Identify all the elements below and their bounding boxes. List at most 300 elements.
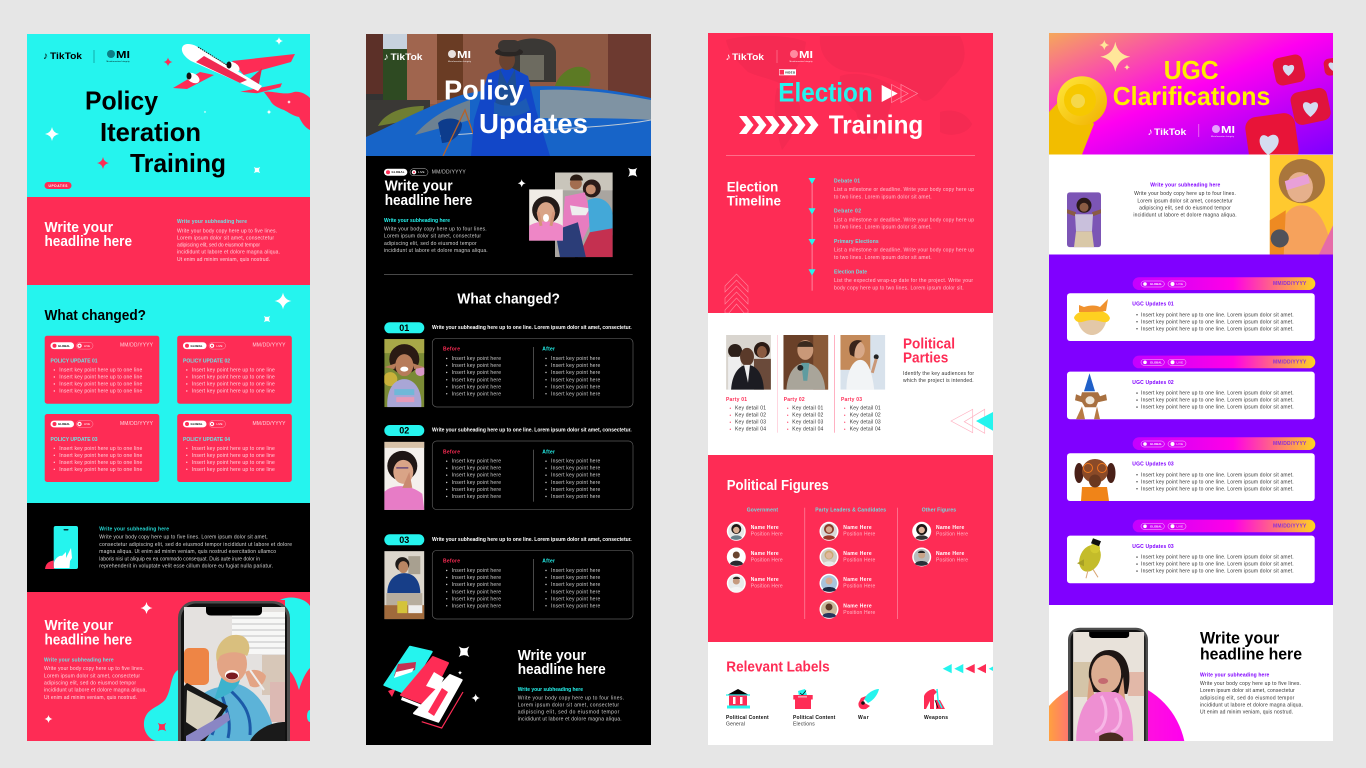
logo: TikTok and MI white: Misinformation Integrity [448, 60, 471, 63]
item 01 before and after: Insert key point here [551, 384, 601, 390]
subheading and body copy: Write your body copy here up to five lines. Lorem ipsum dolor sit amet, [99, 535, 268, 541]
item 02 before and after: Insert key point here [551, 473, 601, 479]
subheading and body copy: Write your subheading here [1200, 672, 1270, 678]
card: policy update 02: GLOBAL [190, 344, 203, 348]
item 01 before and after: Insert key point here [551, 356, 601, 362]
item 01 before and after [383, 322, 633, 407]
heading: election timeline [727, 179, 781, 209]
timeline entries [834, 178, 974, 291]
closing headline and copy: Write your [518, 648, 586, 664]
icon: gold sparkles [1099, 40, 1130, 72]
icon: play arrows [882, 84, 918, 102]
panel: UGC updates [1049, 254, 1333, 606]
item 02 before and after: 02 [399, 426, 409, 436]
party 01 column: Party 01 [726, 397, 747, 403]
photo: woman with disco ball [1270, 155, 1333, 254]
subheading and body copy: Write your body copy here up to five lines. [1200, 681, 1301, 687]
icon: outlined triangles [951, 409, 993, 433]
closing headline and copy: Write your body copy here up to four lines. [518, 695, 624, 701]
closing headline: Write your [1200, 629, 1280, 647]
intro text block: Write your subheading here [384, 218, 450, 224]
item 01 before and after: Insert key point here [452, 356, 501, 362]
logo: TikTok and MI white: TikTok [1154, 127, 1187, 138]
label: war: War [858, 715, 869, 721]
illustration: airplane with red trail [173, 44, 310, 130]
column: government: Government [747, 507, 778, 513]
panel: policy iteration training [27, 34, 310, 197]
update row 03: Insert key point here up to one line. Lorem ipsum dolor sit amet. [1141, 486, 1294, 492]
title: Policy Updates: Policy [444, 74, 524, 105]
heading: relevant labels: Relevant Labels [726, 659, 830, 676]
update row 01: MM/DD/YYYY [1273, 281, 1307, 287]
update row 04: MM/DD/YYYY [1273, 523, 1307, 529]
column: party leaders and candidates [815, 507, 886, 619]
timeline entries: List the expected wrap-up date for the project. Write your [834, 278, 973, 284]
card: policy update 01: Insert key point here up to one line [59, 375, 143, 381]
update row 02: MM/DD/YYYY [1273, 359, 1307, 365]
column: party leaders and candidates: Position Here [843, 558, 876, 564]
update row 01: GLOBAL [1150, 282, 1162, 286]
logo: TikTok and MI white: Misinformation Integrity [1211, 135, 1234, 138]
logo: TikTok and MI white: Misinformation Integrity [790, 60, 812, 63]
intro text: adipiscing elit, sed do eiusmod tempor [1139, 206, 1231, 212]
column: government: Name Here [751, 551, 779, 557]
column: party leaders and candidates: Position Here [843, 532, 876, 538]
intro text: Write your body copy here up to four lines. [1134, 191, 1236, 197]
item 03 before and after: Insert key point here [452, 582, 501, 588]
column: party leaders and candidates: Position Here [843, 584, 876, 590]
intro text block: incididunt ut labore et dolore magna aliqua. [384, 248, 488, 254]
timeline entries: List a milestone or deadline. Write your body copy here up [834, 187, 974, 193]
party 01 column: Key detail 01 [735, 406, 766, 412]
closing headline and copy: adipiscing elit, sed do eiusmod tempor [518, 710, 620, 716]
card: policy update 02: Insert key point here up to one line [192, 382, 275, 388]
label: political content general: Political Content [726, 715, 769, 721]
item 02 before and after: Insert key point here [551, 459, 601, 465]
column: party leaders and candidates: Name Here [843, 577, 872, 583]
card: policy update 04 [177, 414, 292, 482]
column: government: Name Here [751, 525, 779, 531]
item 01 before and after: After [542, 347, 555, 353]
item 01 before and after: Insert key point here [452, 377, 501, 383]
card: policy update 01: Insert key point here up to one line [59, 368, 143, 374]
update row 01: Insert key point here up to one line. Lorem ipsum dolor sit amet. [1141, 326, 1294, 332]
label: weapons: Weapons [924, 715, 948, 721]
title: Policy Updates: Updates [479, 108, 588, 139]
card: policy update 02: Insert key point here up to one line [192, 375, 275, 381]
timeline entries: List a milestone or deadline. Write your body copy here up [834, 248, 974, 254]
decorative sparkles [45, 37, 291, 176]
card: policy update 02: Insert key point here up to one line [192, 368, 275, 374]
icon: heart reactions [1244, 53, 1345, 166]
party 02 column: Key detail 04 [792, 427, 824, 433]
update row 04: Insert key point here up to one line. Lorem ipsum dolor sit amet. [1141, 562, 1294, 568]
item 01 before and after: Insert key point here [551, 391, 601, 397]
item 02 before and after: Insert key point here [452, 473, 501, 479]
intro text block: headline here [385, 193, 472, 209]
subheading and body copy: Write your subheading here [44, 658, 114, 664]
heading: election timeline: Election [727, 179, 778, 195]
item 03 before and after: Insert key point here [551, 575, 601, 581]
item 03 before and after: After [542, 559, 555, 565]
party 03 column: Key detail 01 [850, 406, 881, 412]
decorative sparkles [44, 602, 152, 723]
card: policy update 04: MM/DD/YYYY [252, 421, 286, 427]
item 01 before and after: Insert key point here [551, 370, 601, 376]
item 02 before and after: Insert key point here [551, 494, 601, 500]
card: policy update 02: Insert key point here up to one line [192, 389, 275, 395]
logo: TikTok and MI white: TikTok [390, 52, 423, 63]
tag: videos: VIDEO [785, 71, 796, 75]
item 03 before and after [384, 534, 633, 619]
panel: black policy updates body [366, 156, 651, 745]
icon: hand tapping phone [45, 526, 78, 569]
update row 02: GLOBAL [1150, 360, 1162, 364]
card: policy update 02: MM/DD/YYYY [252, 343, 286, 349]
card: policy update 01: POLICY UPDATE 01 [50, 359, 98, 365]
update row 01: UGC Updates 01 [1132, 302, 1174, 308]
logo: TikTok and MI white: ♪ [384, 52, 388, 63]
item 01 before and after: Insert key point here [551, 363, 601, 369]
intro text block: Write your [385, 179, 453, 195]
update row 04 [1067, 520, 1315, 583]
card: policy update 04: Insert key point here up to one line [192, 453, 275, 459]
closing headline [1200, 629, 1302, 663]
closing headline: headline here [1200, 645, 1302, 663]
card: policy update 03: GLOBAL [58, 422, 70, 426]
illustration: stacked phones [384, 647, 463, 728]
panel: what changed cards [27, 285, 310, 503]
intro text: Lorem ipsum dolor sit amet, consectetur [1137, 198, 1233, 204]
card: policy update 04: Insert key point here up to one line [192, 467, 275, 473]
item 02 before and after [384, 425, 633, 510]
card: policy update 01: LIVE [84, 344, 90, 348]
panel: UGC closing [1049, 605, 1333, 741]
decorative sparkles [453, 641, 480, 702]
headline [44, 618, 132, 648]
intro text block: GLOBAL [392, 170, 405, 174]
logo: TikTok and MI lockup [43, 50, 130, 63]
panel: political parties [708, 313, 993, 455]
update row 01: Insert key point here up to one line. Lorem ipsum dolor sit amet. [1141, 319, 1294, 325]
closing headline and copy: headline here [518, 662, 606, 678]
item 02 before and after: Insert key point here [452, 494, 501, 500]
title: Policy Iteration Training: Iteration [100, 117, 201, 147]
title: UGC Clarifications [1113, 55, 1270, 111]
title: Policy Updates [444, 74, 588, 139]
closing headline and copy: Lorem ipsum dolor sit amet, consectetur [518, 703, 619, 709]
intro text block: Write your body copy here up to four lines. [384, 227, 487, 233]
icon: yellow megaphone [1049, 76, 1107, 154]
card: policy update 03: Insert key point here up to one line [59, 453, 143, 459]
item 02 before and after: Insert key point here [452, 466, 501, 472]
timeline entries: to two lines. Lorem ipsum dolor sit amet. [834, 194, 932, 200]
item 02 before and after: Insert key point here [452, 459, 501, 465]
column: government: Position Here [751, 584, 783, 590]
subheading and body copy [44, 658, 147, 701]
column: party leaders and candidates: Party Leaders & Candidates [815, 507, 886, 513]
tag: updates [44, 182, 72, 189]
title: UGC Clarifications: Clarifications [1113, 81, 1270, 111]
column: party leaders and candidates: Name Here [843, 525, 872, 531]
update row 01: LIVE [1176, 282, 1183, 286]
panel: UGC clarifications header [1049, 33, 1333, 154]
tag: updates: UPDATES [48, 184, 68, 188]
timeline entries: Election Date [834, 270, 867, 276]
subheading and body copy: Ut enim ad minim veniam, quis nostrud. [1200, 709, 1293, 715]
decorative sparkles [261, 292, 292, 325]
logo: TikTok and MI lockup: TikTok [50, 51, 83, 62]
logo: TikTok and MI white [1148, 124, 1235, 138]
item 01 before and after: Insert key point here [452, 384, 501, 390]
intro text [1133, 183, 1237, 219]
update row 04: GLOBAL [1150, 524, 1162, 528]
panel: red intro [27, 197, 310, 285]
card: policy update 03: MM/DD/YYYY [120, 421, 154, 427]
item 03 before and after: Insert key point here [551, 582, 601, 588]
item 03 before and after: Insert key point here [452, 596, 501, 602]
column: government [727, 507, 783, 593]
item 02 before and after: Insert key point here [551, 487, 601, 493]
item 01 before and after: Insert key point here [452, 370, 501, 376]
decorative cyan blobs [144, 598, 313, 741]
item 03 before and after: Write your subheading here up to one line. Lorem ipsum dolor sit amet, consectetur. [432, 537, 632, 543]
card: policy update 01 [45, 336, 159, 404]
timeline entries: Debate 02 [834, 209, 861, 215]
intro text block: LIVE [418, 170, 425, 174]
column: government: Position Here [751, 558, 783, 564]
photo: dancer on purple [1067, 192, 1101, 248]
subheading and body copy: Ut enim ad minim veniam, quis nostrud. [44, 695, 137, 701]
subheading and body copy: incididunt ut labore et dolore magna aliqua. [177, 250, 280, 256]
heading: what changed: What changed? [44, 308, 146, 324]
intro text block: Lorem ipsum dolor sit amet, consectetur [384, 234, 481, 240]
subheading and body copy: adipiscing elit, sed do eiusmod tempor [1200, 695, 1295, 701]
update row 03: Insert key point here up to one line. Lorem ipsum dolor sit amet. [1141, 472, 1294, 478]
column: other figures [912, 507, 968, 566]
party 03 column: Key detail 04 [850, 427, 881, 433]
subheading and body copy: adipiscing elit, sed do eiusmod tempor [44, 680, 136, 686]
label: political content general [726, 689, 769, 727]
logo: TikTok and MI white [384, 50, 471, 63]
logo: TikTok and MI white: MI [1221, 125, 1235, 136]
gradient circle backdrop [1049, 679, 1184, 741]
logo: TikTok and MI white: ♪ [726, 52, 730, 63]
headline: Write your [44, 220, 113, 236]
update row 02: Insert key point here up to one line. Lorem ipsum dolor sit amet. [1141, 405, 1294, 411]
heading: what changed: What changed? [457, 291, 560, 307]
card: policy update 04: GLOBAL [190, 422, 203, 426]
update row 04: Insert key point here up to one line. Lorem ipsum dolor sit amet. [1141, 555, 1294, 561]
party 02 column: Key detail 02 [792, 413, 824, 419]
panel: political figures [708, 455, 993, 642]
label: political content elections [793, 689, 836, 727]
intro text block: adipiscing elit, sed do eiusmod tempor [384, 241, 477, 247]
update row 02: Insert key point here up to one line. Lorem ipsum dolor sit amet. [1141, 398, 1294, 404]
party 02 column: Key detail 03 [792, 420, 824, 426]
item 02 before and after: Insert key point here [551, 466, 601, 472]
panel: UGC intro [1049, 154, 1333, 254]
update row 03: GLOBAL [1150, 442, 1162, 446]
card: policy update 01: Insert key point here up to one line [59, 382, 143, 388]
title: UGC Clarifications: UGC [1164, 55, 1219, 85]
heading: political figures: Political Figures [727, 478, 829, 494]
card: policy update 04: Insert key point here up to one line [192, 446, 275, 452]
panel: black note band [27, 503, 310, 592]
update row 03: LIVE [1176, 442, 1183, 446]
party 03 column: Key detail 02 [850, 413, 881, 419]
card: policy update 03: Insert key point here up to one line [59, 460, 143, 466]
closing headline and copy: Write your subheading here [518, 687, 583, 693]
logo: TikTok and MI lockup: MI [116, 50, 130, 61]
headline: headline here [44, 632, 132, 648]
subheading and body copy: incididunt ut labore et dolore magna aliqua. [44, 688, 147, 694]
card: policy update 04: Insert key point here up to one line [192, 460, 275, 466]
icon: triangle row [943, 664, 993, 673]
card: policy update 01: GLOBAL [58, 344, 70, 348]
item 03 before and after: Insert key point here [452, 575, 501, 581]
update row 04: Insert key point here up to one line. Lorem ipsum dolor sit amet. [1141, 569, 1294, 575]
card: policy update 02: POLICY UPDATE 02 [183, 359, 230, 365]
headline: Write your [44, 618, 113, 634]
item 03 before and after: Insert key point here [452, 603, 501, 609]
card: policy update 03: Insert key point here up to one line [59, 446, 143, 452]
item 01 before and after: 01 [399, 323, 409, 333]
column: other figures: Position Here [936, 532, 968, 538]
subheading and body copy: Write your body copy here up to five lines. [177, 228, 277, 234]
timeline entries: to two lines. Lorem ipsum dolor sit amet. [834, 255, 932, 261]
item 03 before and after: Insert key point here [452, 568, 501, 574]
update row 04: UGC Updates 03 [1132, 544, 1174, 550]
tag: videos [779, 69, 796, 75]
headline: headline here [44, 234, 132, 250]
card: policy update 03: Insert key point here up to one line [59, 467, 143, 473]
title: Election: Election [778, 78, 873, 108]
title: Policy Iteration Training: Training [130, 148, 226, 178]
item 01 before and after: Insert key point here [452, 363, 501, 369]
decorative outline chevrons [725, 274, 748, 313]
panel: election training header [708, 33, 993, 313]
subheading and body copy: Lorem ipsum dolor sit amet, consectetur [177, 236, 274, 242]
column: other figures: Position Here [936, 558, 968, 564]
label: political content general: General [726, 721, 745, 727]
logo: TikTok and MI lockup: ♪ [43, 51, 48, 62]
panel: relevant labels [708, 642, 993, 745]
background dotted world map [726, 36, 972, 150]
card: policy update 02 [177, 336, 292, 404]
icon: chick with top hat [1075, 538, 1105, 578]
column: party leaders and candidates: Name Here [843, 603, 872, 609]
item 03 before and after: Insert key point here [452, 589, 501, 595]
title: Policy Iteration Training: Policy [85, 86, 159, 116]
column: other figures: Name Here [936, 525, 965, 531]
update row 02 [1067, 356, 1315, 419]
subheading and body copy: Lorem ipsum dolor sit amet, consectetur [1200, 688, 1295, 694]
item 02 before and after: Write your subheading here up to one line. Lorem ipsum dolor sit amet, consectetur. [432, 428, 632, 434]
chart: vertical timeline [808, 178, 816, 291]
label: political content elections: Elections [793, 721, 815, 727]
intro text block: MM/DD/YYYY [432, 170, 466, 176]
title: Policy Iteration Training [85, 86, 226, 178]
logo: TikTok and MI white: ♪ [1148, 127, 1152, 138]
party 02 column [783, 335, 835, 433]
update row 03: UGC Updates 03 [1132, 462, 1174, 468]
heading: election timeline: Timeline [727, 193, 781, 209]
subheading and body copy [99, 526, 292, 569]
item 01 before and after: Before [443, 347, 460, 353]
heading: political parties [903, 336, 974, 384]
column: other figures: Other Figures [922, 507, 956, 513]
icon: dog in party hat [1075, 373, 1107, 419]
item 01 before and after: Insert key point here [551, 377, 601, 383]
update row 01 [1067, 277, 1315, 341]
card: policy update 04: LIVE [216, 422, 223, 426]
timeline entries: to two lines. Lorem ipsum dolor sit amet. [834, 225, 932, 231]
timeline entries: Primary Elections [834, 239, 879, 245]
card: policy update 01: MM/DD/YYYY [120, 343, 154, 349]
card: policy update 03: POLICY UPDATE 03 [50, 437, 98, 443]
item 03 before and after: Insert key point here [551, 596, 601, 602]
icon: chevron row [739, 116, 818, 134]
column: party leaders and candidates: Position Here [843, 610, 876, 616]
closing headline and copy [518, 648, 624, 723]
icon: red cross sparkle [154, 719, 170, 735]
phone with creator photo [178, 601, 290, 741]
subheading and body copy: Write your subheading here [177, 219, 247, 225]
subheading and body copy: adipiscing elit, sed do eiusmod tempor [177, 243, 260, 249]
logo: TikTok and MI white: MI [799, 50, 813, 61]
item 01 before and after: Insert key point here [452, 391, 501, 397]
timeline entries: body copy here up to two lines. Lorem ipsum dolor sit. [834, 285, 964, 291]
item 03 before and after: Insert key point here [551, 568, 601, 574]
logo: TikTok and MI lockup: Misinformation Integrity [106, 60, 130, 63]
update row 04: LIVE [1176, 524, 1183, 528]
timeline entries: Debate 01 [834, 178, 860, 184]
party 02 column: Party 02 [784, 397, 805, 403]
update row 03 [1067, 437, 1315, 501]
party 01 column: Key detail 02 [735, 413, 766, 419]
subheading and body copy: Ut enim ad minim veniam, quis nostrud. [177, 257, 270, 263]
logo: TikTok and MI white: TikTok [732, 52, 765, 63]
item 02 before and after: Insert key point here [452, 487, 501, 493]
column: party leaders and candidates: Name Here [843, 551, 872, 557]
subheading and body copy: laboris nisi ut aliquip ex ea commodo consequat. Duis aute irure dolor in [99, 556, 260, 562]
party 01 column: Key detail 03 [735, 420, 766, 426]
party 01 column [726, 335, 778, 433]
update row 02: LIVE [1176, 360, 1183, 364]
subheading and body copy: reprehenderit in voluptate velit esse cillum dolore eu fugiat nulla pariatur. [99, 563, 273, 569]
update row 01: Insert key point here up to one line. Lorem ipsum dolor sit amet. [1141, 312, 1294, 318]
item 02 before and after: Insert key point here [452, 480, 501, 486]
panel: policy updates header photo [366, 34, 651, 156]
item 03 before and after: 03 [399, 535, 409, 545]
subheading and body copy: incididunt ut labore et dolore magna aliqua. [1200, 702, 1303, 708]
heading: political parties: Political [903, 336, 955, 352]
card: policy update 01: Insert key point here up to one line [59, 389, 143, 395]
item 02 before and after: After [542, 449, 555, 455]
subheading and body copy: magna aliqua. Ut enim ad minim veniam, quis nostrud exercitation ullamco [99, 549, 276, 555]
intro text: Write your subheading here [1150, 183, 1221, 189]
item 03 before and after: Before [443, 559, 460, 565]
update row 02: UGC Updates 02 [1132, 380, 1174, 386]
subheading and body copy [1200, 672, 1303, 715]
item 03 before and after: Insert key point here [551, 589, 601, 595]
phone with laughing woman [1068, 628, 1148, 741]
label: political content elections: Political Content [793, 715, 836, 721]
icon: cat in costume [1074, 299, 1110, 335]
column: other figures: Name Here [936, 551, 965, 557]
icon: dachshund with glasses [1074, 459, 1116, 501]
